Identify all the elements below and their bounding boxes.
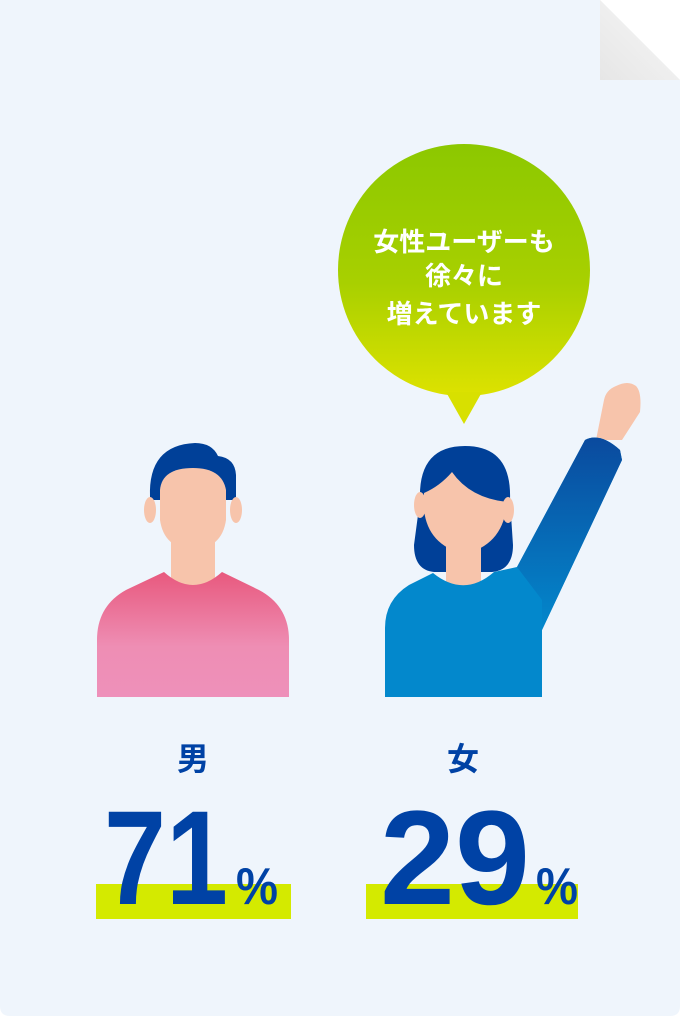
bubble text [373,227,555,329]
stat: men 71%: 71 [104,784,228,933]
stat: women 29%: % [536,858,578,916]
figure: man [97,443,289,697]
label: women: 女 [447,741,479,777]
highlight bar: women [366,884,578,919]
figure: woman [385,383,640,697]
bubble text: 女性ユーザーも [373,227,555,257]
bubble text: 徐々に [425,261,503,291]
stat: women 29%: 29 [380,784,530,933]
bubble text: 増えています [387,299,541,329]
stat: men 71%: % [236,858,278,916]
speech bubble [338,144,590,424]
highlight bar: men [96,884,291,919]
label: men: 男 [177,741,209,777]
